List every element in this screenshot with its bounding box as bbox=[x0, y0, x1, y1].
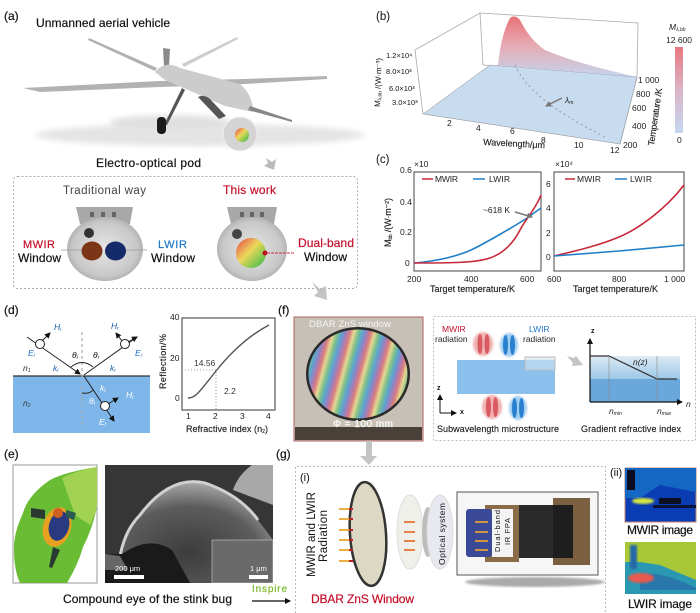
panel: (g) imaging system bbox=[276, 447, 696, 613]
panel: (d) reflection and refraction bbox=[4, 303, 275, 435]
axis ticks wavelength: 12 bbox=[610, 145, 620, 155]
colorbar bbox=[666, 22, 692, 145]
field labels: i bbox=[77, 355, 79, 361]
axis ticks z: 3.0×10³ bbox=[392, 98, 418, 107]
radiation waves incoming bbox=[473, 332, 518, 357]
angle arcs bbox=[71, 362, 93, 393]
field labels: r bbox=[117, 326, 119, 332]
SEM image: 1 μm bbox=[250, 564, 267, 573]
callout: lambda m: λ bbox=[565, 95, 569, 105]
photo of window: DBAR ZnS window bbox=[309, 319, 391, 330]
field labels: H bbox=[111, 321, 117, 331]
axis label z: /(W·m⁻³) bbox=[374, 57, 384, 91]
label: MWIR radiation: radiation bbox=[435, 334, 468, 344]
gradient index chart: n bbox=[609, 406, 614, 416]
arrow: f to g bbox=[360, 441, 377, 465]
field labels: 2 bbox=[27, 403, 31, 409]
label: dual-band window: Dual-band bbox=[298, 236, 354, 250]
axis ticks temperature: 200 bbox=[623, 140, 637, 150]
normal line bbox=[81, 332, 83, 425]
field labels: k bbox=[53, 363, 57, 373]
field labels bbox=[23, 321, 143, 428]
LWIR thermal image bbox=[625, 542, 696, 594]
field labels: r bbox=[114, 368, 116, 374]
reflectance chart: ) bbox=[265, 424, 268, 434]
field labels: i bbox=[60, 327, 62, 333]
radiation waves outgoing bbox=[482, 395, 527, 420]
pod: traditional bbox=[61, 207, 147, 281]
axis ticks wavelength bbox=[447, 118, 620, 155]
arrow: comparison to panel f bbox=[312, 282, 327, 300]
label: dual-band window bbox=[298, 236, 354, 264]
surface floor bbox=[423, 65, 637, 144]
field labels: t bbox=[132, 395, 134, 401]
reflectance chart: Refractive index (n bbox=[186, 424, 262, 434]
label: dual-band window: Window bbox=[304, 250, 347, 264]
arrow: pod to comparison bbox=[264, 158, 276, 170]
substrate block bbox=[13, 376, 150, 433]
vertical label: radiation: Radiation bbox=[318, 510, 330, 562]
incident ray bbox=[27, 337, 80, 374]
panel: (e) compound eye of stink bug bbox=[4, 447, 290, 606]
label (e): (e) bbox=[4, 447, 19, 461]
label: optical system: Optical system bbox=[437, 503, 447, 565]
dashed frame: microstructure bbox=[434, 316, 696, 440]
chart right: 600-1000 K: 6 bbox=[546, 179, 551, 189]
chart right: 600-1000 K: 2 bbox=[546, 228, 551, 238]
axis ticks temperature: 1 000 bbox=[638, 75, 660, 85]
label (b): (b) bbox=[376, 11, 390, 23]
drone illustration bbox=[23, 37, 327, 134]
interface line bbox=[13, 375, 150, 377]
axis ticks z: 6.0×10³ bbox=[389, 84, 415, 93]
field labels: k bbox=[100, 383, 104, 393]
field labels: t bbox=[104, 388, 106, 394]
label: MWIR window: MWIR bbox=[23, 239, 55, 251]
label: LWIR window bbox=[151, 239, 195, 265]
chart left: 200-650 K bbox=[383, 159, 541, 294]
reflectance chart: 4 bbox=[266, 411, 271, 421]
reflectance chart: 20 bbox=[170, 353, 180, 363]
axis label wavelength: Wavelength/μm bbox=[483, 137, 545, 150]
radiation arrows at lens bbox=[404, 522, 415, 550]
reflectance chart: Reflection/% bbox=[158, 334, 168, 389]
field labels: k bbox=[110, 363, 114, 373]
field labels: i bbox=[57, 368, 59, 374]
label: LWIR radiation: LWIR bbox=[529, 324, 550, 334]
zoom box on slab bbox=[525, 357, 555, 370]
chart right: 600-1000 K: 1 000 bbox=[664, 274, 686, 284]
axis ticks z bbox=[386, 51, 418, 107]
label (g): (g) bbox=[276, 447, 291, 461]
field labels: θ bbox=[89, 396, 94, 406]
transmitted ray bbox=[84, 376, 114, 421]
chart left: 200-650 K: 0.6 bbox=[400, 165, 412, 175]
panel: (f) DBAR ZnS window bbox=[278, 303, 696, 441]
chart left: 200-650 K: bb bbox=[388, 234, 394, 240]
axis label z: M bbox=[373, 100, 382, 107]
gradient index chart: n bbox=[657, 406, 662, 416]
heading: traditional way: Traditional way bbox=[63, 185, 146, 197]
xz axes: z bbox=[437, 385, 441, 392]
axis ticks wavelength: 2 bbox=[447, 118, 452, 128]
MWIR thermal image bbox=[625, 468, 696, 522]
leaf photo with bug bbox=[13, 465, 97, 583]
field labels: E bbox=[135, 348, 141, 358]
window ellipse bbox=[346, 481, 390, 587]
vertical label: radiation bbox=[306, 492, 330, 577]
chart right: 600-1000 K: 600 bbox=[547, 274, 561, 284]
field labels: θ bbox=[72, 350, 77, 360]
field labels: t bbox=[105, 422, 107, 428]
label (f): (f) bbox=[278, 303, 289, 317]
chart left: 200-650 K: 0.4 bbox=[400, 197, 412, 207]
axis ticks z: 8.0×10³ bbox=[386, 67, 412, 76]
label (a): (a) bbox=[4, 9, 19, 23]
photo of window: Φ = 100 mm bbox=[333, 419, 393, 430]
chart right: 600-1000 K: 800 bbox=[612, 274, 626, 284]
gradient index chart: n(z) bbox=[633, 357, 648, 367]
reflectance chart: 3 bbox=[240, 411, 245, 421]
caption: MWIR image: MWIR image bbox=[627, 523, 693, 537]
reflectance chart: 2 bbox=[262, 429, 265, 435]
chart right: 600-1000 K: 0 bbox=[546, 252, 551, 262]
gradient index chart bbox=[590, 328, 691, 417]
label: MWIR window: Window bbox=[18, 251, 61, 265]
caption: compound eye: Compound eye of the stink bug bbox=[63, 592, 232, 606]
axis ticks temperature: 600 bbox=[632, 103, 646, 113]
colorbar: M bbox=[669, 22, 676, 32]
3D box frame bbox=[415, 13, 638, 144]
reflected ray bbox=[84, 337, 137, 375]
reflectance chart: 1 bbox=[186, 411, 191, 421]
radiation arrows at window bbox=[339, 509, 353, 561]
reflectance chart: 0 bbox=[175, 393, 180, 403]
microstructure slab bbox=[457, 360, 555, 394]
label (i): (i) bbox=[300, 472, 310, 484]
chart right: 600-1000 K: Target temperature/K bbox=[573, 284, 658, 294]
field labels: θ bbox=[93, 350, 98, 360]
field labels: n bbox=[23, 398, 28, 408]
axis ticks wavelength: 6 bbox=[510, 126, 515, 136]
gradient index chart: z bbox=[591, 328, 595, 335]
field labels: r bbox=[141, 353, 143, 359]
xz axes bbox=[437, 385, 464, 416]
detector housing: Dual-band bbox=[493, 510, 502, 552]
reflectance chart bbox=[158, 312, 275, 435]
colorbar: 12 600 bbox=[666, 35, 692, 45]
arrow: slab to gradient bbox=[567, 356, 583, 366]
detector housing: IR FPA bbox=[503, 518, 512, 545]
label: MWIR radiation bbox=[435, 324, 468, 344]
inspire arrow: Inspire bbox=[252, 584, 287, 595]
axis label z: λ,bb bbox=[377, 91, 384, 100]
chart right: 600-1000 K: LWIR bbox=[630, 174, 652, 184]
colorbar: λ,bb bbox=[675, 27, 686, 33]
axis ticks temperature bbox=[623, 75, 660, 150]
chart left: 200-650 K: 400 bbox=[464, 274, 478, 284]
field labels: t bbox=[94, 401, 96, 407]
chart right: 600-1000 K: ×10⁴ bbox=[555, 159, 573, 169]
caption: DBAR ZnS window: DBAR ZnS Window bbox=[311, 592, 414, 606]
field labels: E bbox=[28, 348, 34, 358]
chart left: 200-650 K: LWIR bbox=[489, 174, 510, 184]
SEM image: 200 μm bbox=[115, 564, 140, 573]
axis ticks temperature: 800 bbox=[636, 89, 650, 99]
dashed frame: imaging system bbox=[296, 466, 606, 613]
chart left: 200-650 K: /(W·m⁻²) bbox=[383, 198, 393, 234]
inspire arrow bbox=[252, 584, 290, 601]
field labels: r bbox=[98, 355, 100, 361]
surface peak bbox=[490, 16, 637, 77]
chart left: 200-650 K: 0 bbox=[405, 258, 410, 268]
chart left: 200-650 K: ~618 K bbox=[483, 205, 510, 215]
reflectance chart: 2.2 bbox=[224, 386, 236, 396]
panel: (b) 3D blackbody radiation surface bbox=[373, 11, 692, 155]
heading: this work: This work bbox=[223, 183, 277, 197]
axis ticks z: 1.2×10⁴ bbox=[386, 51, 412, 60]
panel: (c) radiance line charts bbox=[376, 154, 686, 294]
chart left: 200-650 K: MWIR bbox=[435, 174, 458, 184]
label: LWIR radiation: radiation bbox=[523, 334, 556, 344]
field symbols bbox=[36, 333, 137, 410]
label: LWIR window: Window bbox=[151, 251, 195, 265]
pod: this work bbox=[217, 207, 295, 281]
chart left: 200-650 K: Target temperature/K bbox=[430, 284, 515, 294]
label (ii): (ii) bbox=[610, 467, 622, 479]
chart left: 200-650 K: 200 bbox=[407, 274, 421, 284]
label (c): (c) bbox=[376, 154, 390, 166]
axis ticks wavelength: 4 bbox=[476, 123, 481, 133]
label: LWIR radiation bbox=[523, 324, 556, 344]
axis label temperature: Temperature /K bbox=[646, 87, 664, 146]
chart right: 600-1000 K bbox=[546, 159, 686, 294]
label: MWIR window bbox=[18, 239, 61, 265]
dashed frame: pod comparison bbox=[14, 176, 358, 288]
callout: lambda m: m bbox=[569, 100, 573, 106]
caption: gradient refractive index: Gradient refractive index bbox=[581, 424, 682, 434]
chart left: 200-650 K: 600 bbox=[520, 274, 534, 284]
reflectance chart: 40 bbox=[170, 312, 180, 322]
panel: (a) UAV and electro-optical pod bbox=[4, 9, 365, 288]
axis ticks wavelength: 10 bbox=[574, 140, 584, 150]
caption: LWIR image: LWIR image bbox=[628, 597, 692, 611]
field labels: E bbox=[99, 417, 105, 427]
chart left: 200-650 K: ×10 bbox=[414, 159, 429, 169]
reflectance chart: 2 bbox=[213, 411, 218, 421]
callout: lambda m bbox=[546, 95, 573, 106]
detector housing bbox=[457, 492, 605, 587]
label: LWIR window: LWIR bbox=[158, 239, 187, 251]
heading: unmanned aerial vehicle: Unmanned aerial vehicle bbox=[36, 16, 170, 30]
vertical label: radiation: MWIR and LWIR bbox=[306, 492, 318, 577]
drone shadow bbox=[35, 115, 365, 146]
gradient index chart: n bbox=[686, 399, 691, 409]
axis ticks wavelength: 8 bbox=[541, 135, 546, 145]
label: MWIR radiation: MWIR bbox=[442, 324, 466, 334]
SEM image bbox=[105, 465, 273, 583]
gradient index chart: max bbox=[662, 411, 672, 417]
pod highlight on drone bbox=[223, 117, 257, 151]
caption: subwavelength microstructure: Subwavelength microstructure bbox=[437, 424, 559, 434]
chart left: 200-650 K: 0.2 bbox=[400, 227, 412, 237]
xz axes: x bbox=[460, 409, 464, 416]
gradient index chart: min bbox=[614, 411, 622, 417]
field labels: H bbox=[126, 390, 132, 400]
photo of window bbox=[294, 317, 423, 441]
colorbar: 0 bbox=[677, 135, 682, 145]
peak wavelength ridge bbox=[515, 65, 605, 137]
chart right: 600-1000 K: 4 bbox=[546, 203, 551, 213]
axis ticks temperature: 400 bbox=[632, 121, 646, 131]
field labels: H bbox=[54, 322, 60, 332]
field labels: 1 bbox=[28, 368, 31, 374]
field labels: n bbox=[23, 363, 28, 373]
field labels: i bbox=[34, 353, 36, 359]
reflectance chart: 14.56 bbox=[194, 358, 216, 368]
caption: electro-optical pod: Electro-optical pod bbox=[96, 156, 201, 170]
chart right: 600-1000 K: MWIR bbox=[577, 174, 601, 184]
label (d): (d) bbox=[4, 303, 19, 317]
chart left: 200-650 K: M bbox=[383, 240, 393, 247]
optical lenses bbox=[397, 495, 453, 569]
